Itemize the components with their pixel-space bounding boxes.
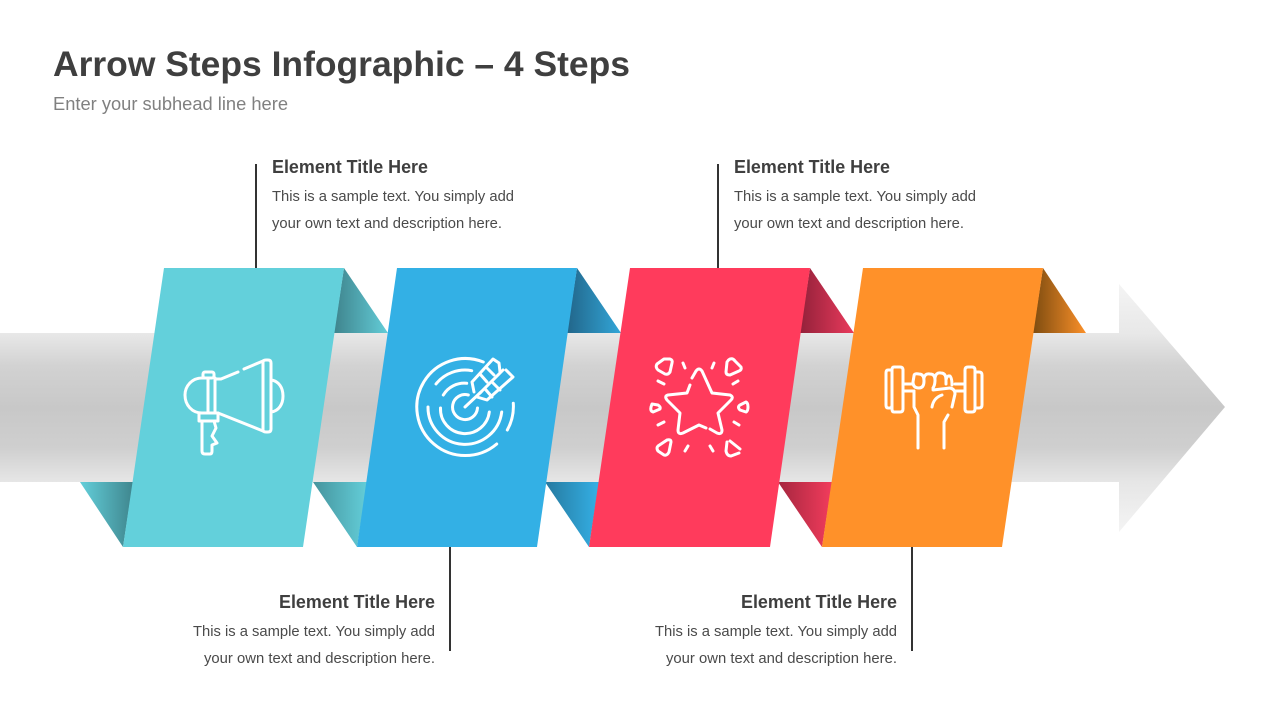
icon: fist with dumbbell (886, 367, 982, 448)
text block: step 4: Element Title Here (741, 591, 897, 612)
ribbon folds (80, 268, 1086, 547)
panel: step 2 (357, 268, 577, 547)
text block: step 1: This is a sample text. You simply add (272, 189, 514, 205)
title: Arrow Steps Infographic – 4 Steps (53, 45, 630, 84)
icon: target with arrow (417, 359, 513, 456)
text block: step 1 (272, 156, 514, 232)
icon: star burst (651, 359, 748, 456)
text block: step 2 (193, 591, 435, 667)
gray arrow (0, 284, 1225, 532)
connector line: step 2 (449, 547, 451, 651)
text block: step 4: This is a sample text. You simply add (655, 624, 897, 640)
text block: step 2: your own text and description here. (204, 651, 435, 667)
connector line: step 1 (255, 164, 257, 268)
connector line: step 3 (717, 164, 719, 268)
text block: step 4 (655, 591, 897, 667)
connector line: step 4 (911, 547, 913, 651)
text block: step 3: your own text and description here. (734, 216, 964, 232)
panel: step 4 (822, 268, 1043, 547)
icon: megaphone (185, 360, 283, 454)
text block: step 3 (734, 156, 976, 232)
subhead: Enter your subhead line here (53, 94, 288, 114)
text block: step 2: Element Title Here (279, 591, 435, 612)
panel: step 3 (589, 268, 810, 547)
text block: step 4: your own text and description here. (666, 651, 897, 667)
text block: step 1: Element Title Here (272, 156, 428, 177)
panel: step 1 (123, 268, 344, 547)
text block: step 1: your own text and description here. (272, 216, 502, 232)
text block: step 2: This is a sample text. You simply add (193, 624, 435, 640)
text block: step 3: Element Title Here (734, 156, 890, 177)
text block: step 3: This is a sample text. You simply add (734, 189, 976, 205)
